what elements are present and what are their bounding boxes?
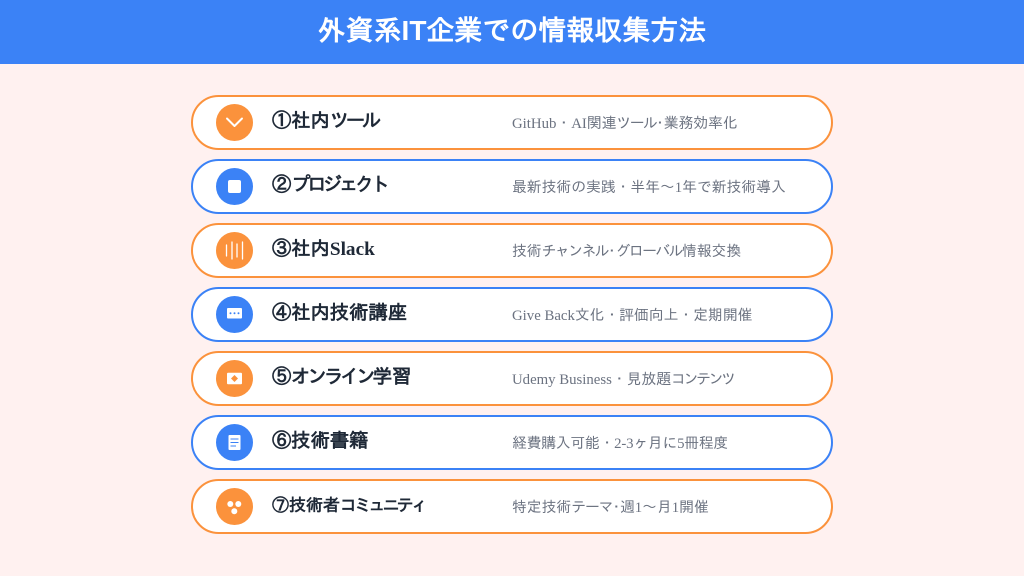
description: 最新技術の実践・半年〜1年で新技術導入 xyxy=(512,180,786,196)
description: Give Back文化・評価向上・定期開催 xyxy=(512,308,752,324)
panel: 社内ツール xyxy=(191,95,833,150)
panel: 技術書籍 xyxy=(191,415,833,470)
description: Udemy Business・見放題コンテンツ xyxy=(512,372,734,388)
description: 特定技術テーマ･週1〜月1開催 xyxy=(512,500,709,516)
header band xyxy=(0,0,1024,64)
heading: ④社内技術講座 xyxy=(272,303,407,324)
icon: chevron xyxy=(216,104,253,141)
heading: ③社内Slack xyxy=(272,239,375,260)
panel: オンライン学習 xyxy=(191,351,833,406)
icon: video xyxy=(216,360,253,397)
heading: ①社内ツール xyxy=(272,111,378,132)
description: 技術チャンネル･グローバル情報交換 xyxy=(512,244,741,260)
title: 外資系IT企業での情報収集方法 xyxy=(318,15,706,46)
heading: ⑥技術書籍 xyxy=(272,431,368,452)
heading: ②プロジェクト xyxy=(272,175,387,196)
panel: 社内技術講座 xyxy=(191,287,833,342)
panel: 技術者コミュニティ xyxy=(191,479,833,534)
icon: bars xyxy=(216,232,253,269)
heading: ⑦技術者コミュニティ xyxy=(272,496,425,515)
panel: プロジェクト xyxy=(191,159,833,214)
icon: document xyxy=(216,424,253,461)
icon: chat dots xyxy=(216,296,253,333)
panel: 社内Slack xyxy=(191,223,833,278)
description: GitHub・AI関連ツール･業務効率化 xyxy=(512,116,738,132)
icon: square xyxy=(216,168,253,205)
heading: ⑤オンライン学習 xyxy=(272,367,411,388)
description: 経費購入可能・2-3ヶ月に5冊程度 xyxy=(512,436,728,452)
icon: three dots xyxy=(216,488,253,525)
